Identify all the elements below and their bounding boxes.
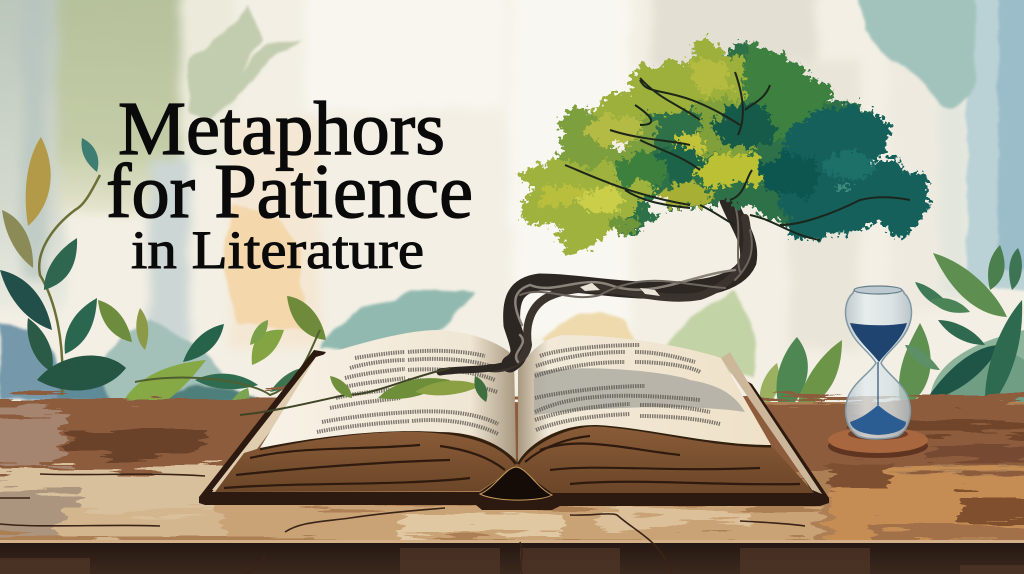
page underside shadow: [260, 425, 771, 464]
right page: [518, 335, 771, 462]
foliage stem: [39, 175, 100, 395]
table cracks: [0, 474, 805, 574]
hourglass on wooden base: [828, 286, 928, 458]
title line 3: in Literature: [131, 220, 424, 280]
vine on book: [240, 368, 487, 415]
base: [828, 434, 928, 458]
glass: [846, 286, 911, 439]
page edge strips: [212, 357, 324, 490]
title line 1: Metaphors: [118, 87, 445, 171]
twisted tree trunk: [440, 200, 752, 372]
open book: [199, 330, 829, 510]
title line 2: for Patience: [106, 148, 473, 234]
upper blue sand: [850, 323, 907, 362]
lower blue sand: [850, 405, 906, 435]
left page: [260, 330, 516, 460]
background: watercolor wash: [0, 0, 1024, 410]
page block left: [215, 430, 516, 492]
tree crown foliage: [515, 38, 930, 258]
wooden table: [0, 398, 1024, 574]
spine gap: [480, 467, 552, 500]
tree branches: [565, 72, 910, 240]
right page shadow band: [534, 368, 745, 415]
right background foliage: [760, 245, 1024, 402]
table front edge: [0, 542, 1024, 574]
right page text lines: [535, 345, 720, 430]
book cover: [199, 350, 829, 510]
left page text lines: [317, 351, 498, 434]
golden leaf: [26, 137, 51, 226]
page block right: [516, 425, 814, 493]
left foliage: [0, 137, 326, 429]
page block grain: [224, 436, 800, 488]
